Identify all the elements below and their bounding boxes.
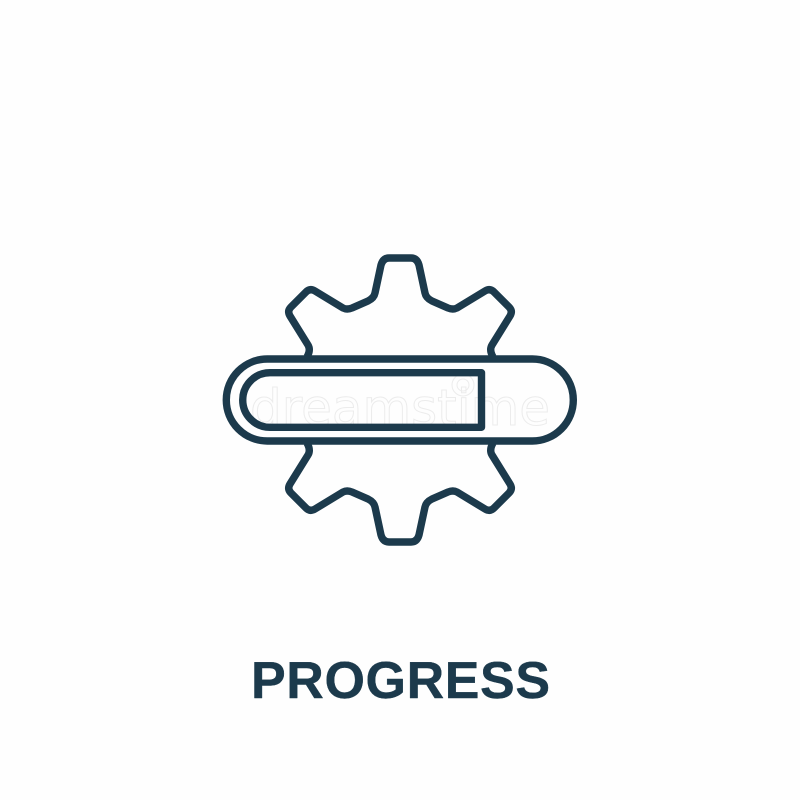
icon: gear with progress bar <box>226 258 573 542</box>
watermark: dreamstime <box>250 379 550 437</box>
gear: lower half <box>289 443 511 542</box>
title: PROGRESS <box>251 652 550 710</box>
gear: upper half <box>289 258 511 357</box>
progress bar: fill outline <box>243 373 482 427</box>
progress bar: outer pill <box>226 359 573 441</box>
